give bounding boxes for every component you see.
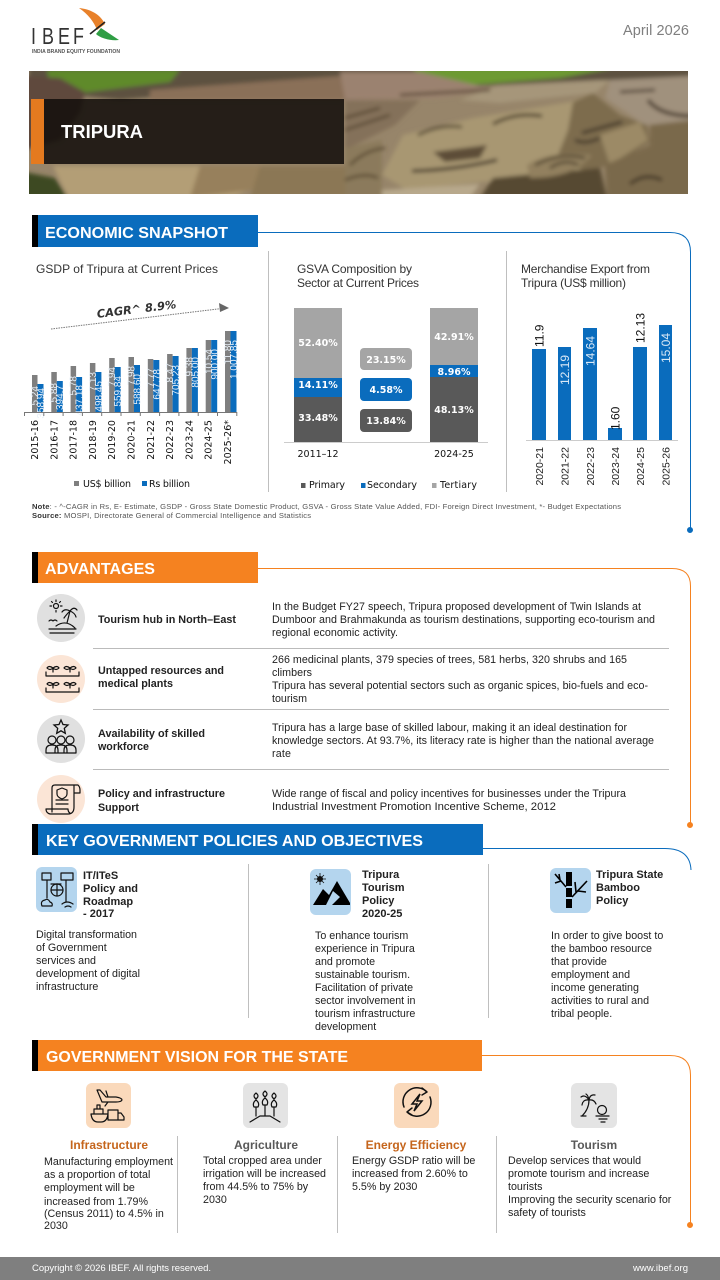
chart: GSVA composition: 42.91% xyxy=(434,332,474,343)
connector: economic snapshot xyxy=(258,232,692,532)
chart: GSDP xyxy=(24,262,240,490)
chart: GSVA composition: 33.48% xyxy=(298,413,338,424)
vision title: tourism: Tourism xyxy=(571,1138,617,1152)
advantage label: policy xyxy=(98,788,225,814)
policy title: tourism: Policy xyxy=(362,895,395,907)
vision text: tourism: safety of tourists xyxy=(508,1207,586,1219)
chart: GSDP: 437.18 xyxy=(74,385,86,416)
icon: energy xyxy=(394,1083,439,1128)
chart: merchandise export: Tripura (US$ million) xyxy=(521,276,626,290)
vision text: tourism: Improving the security scenario for xyxy=(508,1194,672,1206)
chart: GSDP: GSDP of Tripura at Current Prices xyxy=(36,262,218,276)
chart: GSVA composition: Sector at Current Prices xyxy=(297,276,419,290)
source note: Note: - ^-CAGR in Rs, E- Estimate, GSDP - Gross State Domestic Product, GSVA - Gross State Value Added, FDI- Foreign Direct Investment, *- Budget Expectations xyxy=(32,502,621,511)
chart: GSDP: 2024-25 xyxy=(204,420,215,460)
chart: GSDP: 2019-20 xyxy=(107,420,118,460)
policy text: tourism: experience in Tripura xyxy=(315,943,415,955)
policy text: tourism: sustainable tourism. xyxy=(315,969,410,981)
advantage text: workforce xyxy=(272,722,654,760)
chart: GSVA composition: 52.40% xyxy=(298,338,338,349)
advantage text: workforce: knowledge sectors. At 93.7%, its literacy rate is higher than the national average xyxy=(272,735,654,747)
vision text: infrastructure: 2030 xyxy=(44,1220,68,1232)
chart: merchandise export: 2025-26 xyxy=(660,447,672,486)
chart: GSDP: 2017-18 xyxy=(69,420,80,460)
advantage label: tourism: Tourism hub in North–East xyxy=(98,614,236,626)
advantage text: tourism: Dumboor and Brahmakunda as tourism destinations, supporting eco-tourism and xyxy=(272,614,655,626)
chart: GSVA composition: Tertiary xyxy=(439,480,477,491)
chart: merchandise export: 2022-23 xyxy=(585,447,597,486)
chart: GSVA composition: 48.13% xyxy=(434,405,474,416)
advantage label: plants: Untapped resources and xyxy=(98,665,224,677)
policy text: tourism: To enhance tourism xyxy=(315,930,408,942)
chart: GSDP: 394.7 xyxy=(55,385,66,410)
vision text: infrastructure: Manufacturing employment xyxy=(44,1156,173,1168)
chart: merchandise export: 2024-25 xyxy=(635,447,647,486)
advantage text: workforce: Tripura has a large base of skilled labour, making it an ideal destination for xyxy=(272,722,627,734)
icon: bamboo xyxy=(550,868,591,913)
policy text: IT: Digital transformation xyxy=(36,929,137,941)
chart: GSDP: 588.60 xyxy=(132,374,144,405)
chart: GSDP: 2021-22 xyxy=(146,420,157,460)
logo: IBEF: INDIA BRAND EQUITY FOUNDATION xyxy=(32,49,120,55)
policy text: tourism: sector involvement in xyxy=(315,995,415,1007)
chart: GSDP: 2023-24 xyxy=(184,420,195,460)
heading: government vision xyxy=(32,1040,482,1071)
chart: GSDP: CAGR^ 8.9% xyxy=(96,298,177,321)
chart: merchandise export xyxy=(521,262,678,486)
chart: GSDP: 2020-21 xyxy=(126,420,138,460)
chart: GSDP: 2025-26* xyxy=(223,420,234,464)
policy text: bamboo: tribal people. xyxy=(551,1008,612,1020)
connector: advantages xyxy=(258,568,692,828)
policy title: bamboo: Bamboo xyxy=(596,882,640,894)
divider xyxy=(268,251,506,492)
vision text: tourism: tourists xyxy=(508,1181,542,1193)
policy text: tourism: tourism infrastructure xyxy=(315,1008,415,1020)
date: April 2026 xyxy=(623,23,689,39)
chart: GSVA composition: 2024-25 xyxy=(434,449,474,460)
vision text: energy xyxy=(352,1155,475,1193)
chart: GSDP: 11.80 xyxy=(223,340,234,364)
policy title: IT xyxy=(83,870,138,920)
heading: government vision: GOVERNMENT VISION FOR THE STATE xyxy=(46,1049,348,1066)
chart: GSVA composition: 13.84% xyxy=(366,416,406,427)
chart: GSDP: Rs billion xyxy=(149,479,190,490)
icon: infrastructure xyxy=(86,1083,131,1128)
policy text: bamboo xyxy=(551,930,663,1020)
advantage label: workforce xyxy=(97,728,205,753)
chart: GSDP: 900.00 xyxy=(210,349,221,380)
vision text: infrastructure xyxy=(44,1156,173,1232)
chart: merchandise export: 2023-24 xyxy=(610,447,622,486)
footer: www.ibef.org xyxy=(632,1263,688,1274)
chart: merchandise export: Merchandise Export from xyxy=(521,262,650,276)
chart: GSVA composition xyxy=(284,262,488,491)
connector: vision xyxy=(482,1056,692,1228)
chart: GSVA composition: 14.11% xyxy=(298,380,338,391)
chart: merchandise export: 1.60 xyxy=(608,406,622,430)
chart: GSDP: 2022-23 xyxy=(165,420,176,460)
advantage text: policy: Industrial Investment Promotion Incentive Scheme, 2012 xyxy=(272,801,556,813)
chart: GSDP: 7.77 xyxy=(146,368,157,387)
panel: vision xyxy=(44,1083,672,1233)
advantage label: workforce: workforce xyxy=(97,741,149,753)
vision text: tourism: Develop services that would xyxy=(508,1155,641,1167)
policy text: tourism xyxy=(315,930,415,1033)
vision text: tourism: promote tourism and increase xyxy=(508,1168,649,1180)
chart: GSDP: 5.88 xyxy=(49,383,60,402)
chart: merchandise export: 12.19 xyxy=(558,355,572,385)
chart: merchandise export: 15.04 xyxy=(659,333,673,363)
vision text: energy: increased from 2.60% to xyxy=(352,1168,468,1180)
source note xyxy=(32,502,621,520)
banner title box: TRIPURA xyxy=(61,122,143,142)
chart: merchandise export: 2020-21 xyxy=(534,447,546,486)
connector: key policies xyxy=(483,848,691,870)
chart: GSVA composition: 2011–12 xyxy=(297,449,339,460)
vision text: tourism xyxy=(508,1155,672,1219)
chart: GSDP: 559.84 xyxy=(113,376,124,407)
chart: GSDP: 5.24 xyxy=(30,386,41,405)
advantage text: plants xyxy=(272,654,648,705)
policy title: bamboo: Tripura State xyxy=(596,869,663,881)
chart: GSDP: 2016-17 xyxy=(49,420,60,460)
advantage text: plants: climbers xyxy=(272,667,312,679)
icon: IT xyxy=(36,867,77,912)
advantage text: tourism xyxy=(272,601,655,639)
chart: merchandise export: 11.9 xyxy=(532,324,546,347)
advantage text: policy: Wide range of fiscal and policy incentives for businesses under the Tripura xyxy=(272,788,626,800)
policy title: IT: Policy and xyxy=(83,883,138,895)
advantage label: plants: medical plants xyxy=(98,678,173,690)
panel: policies xyxy=(36,864,663,1033)
advantage text: workforce: rate xyxy=(272,748,291,760)
policy text: tourism: development xyxy=(315,1021,376,1033)
policy title: tourism: 2020-25 xyxy=(362,908,402,920)
chart: GSVA composition: 8.96% xyxy=(438,367,471,378)
chart: GSDP: 805.00 xyxy=(190,357,202,388)
policy title: IT: IT/ITeS xyxy=(83,870,118,882)
policy text: bamboo: that provide xyxy=(551,956,607,968)
chart: GSVA composition: 23.15% xyxy=(366,355,406,366)
logo: IBEF xyxy=(31,8,120,55)
chart: GSVA composition: Secondary xyxy=(367,480,417,491)
heading: advantages xyxy=(32,552,258,583)
advantage text: plants: Tripura has several potential sectors such as organic spices, bio-fuels and eco- xyxy=(272,680,648,692)
advantage label: policy: Policy and infrastructure xyxy=(98,788,225,800)
chart: GSDP: 358.94 xyxy=(36,388,47,419)
policy text: bamboo: income generating xyxy=(551,982,639,994)
advantage text: tourism: In the Budget FY27 speech, Tripura proposed development of Twin Islands at xyxy=(272,601,641,613)
chart: GSVA composition: GSVA Composition by xyxy=(297,262,412,276)
vision text: infrastructure: employment will be xyxy=(44,1182,135,1194)
chart: GSDP: 7.13 xyxy=(88,372,99,391)
chart: GSVA composition: Primary xyxy=(309,480,345,491)
vision title: infrastructure: Infrastructure xyxy=(70,1138,148,1152)
banner title box xyxy=(31,99,344,164)
chart: GSDP: 2015-16 xyxy=(30,420,41,460)
policy text: tourism: Facilitation of private xyxy=(315,982,413,994)
policy title: tourism xyxy=(362,869,405,920)
chart: GSDP: 2018-19 xyxy=(88,420,99,460)
vision text: infrastructure: (Census 2011) to 4.5% in xyxy=(44,1208,164,1220)
footer: Copyright © 2026 IBEF. All rights reserved. xyxy=(32,1263,211,1274)
vision text: energy: Energy GSDP ratio will be xyxy=(352,1155,475,1167)
icon: policy scroll xyxy=(37,775,85,823)
advantage label: plants xyxy=(98,665,224,690)
heading: key government policies xyxy=(32,824,483,855)
vision title: energy: Energy Efficiency xyxy=(366,1138,467,1152)
vision text: infrastructure: increased from 1.79% xyxy=(44,1196,148,1208)
icon: skilled workforce xyxy=(37,715,85,763)
chart: GSDP: 647.78 xyxy=(152,369,163,400)
policy title: bamboo xyxy=(596,869,663,907)
chart: GSDP: 7.94 xyxy=(107,367,118,386)
heading: economic snapshot xyxy=(32,215,258,247)
vision text: agriculture: irrigation will be increased xyxy=(203,1168,326,1180)
policy text: bamboo: employment and xyxy=(551,969,630,981)
footer xyxy=(0,1257,720,1280)
chart: GSDP: 498.45 xyxy=(94,381,105,412)
chart: GSDP: 8.47 xyxy=(165,363,176,382)
chart: GSDP: 705.23 xyxy=(171,365,182,396)
vision text: infrastructure: as a proportion of total xyxy=(44,1169,150,1181)
policy title: bamboo: Policy xyxy=(596,895,629,907)
policy text: IT: services and xyxy=(36,955,96,967)
chart: GSDP: 1,007.85 xyxy=(229,340,240,379)
heading: economic snapshot: ECONOMIC SNAPSHOT xyxy=(45,225,228,242)
vision text: agriculture: Total cropped area under xyxy=(203,1155,322,1167)
source note: Source: MOSPI, Directorate General of Commercial Intelligence and Statistics xyxy=(32,511,311,520)
advantage text: plants: tourism xyxy=(272,693,307,705)
chart: GSDP: 9.38 xyxy=(184,357,196,376)
panel: advantages list xyxy=(37,594,669,823)
chart: GSVA composition: 4.58% xyxy=(370,385,403,396)
policy title: IT: - 2017 xyxy=(83,908,114,920)
policy text: IT: of Government xyxy=(36,942,107,954)
policy text: IT: development of digital xyxy=(36,968,140,980)
heading: key government policies: KEY GOVERNMENT POLICIES AND OBJECTIVES xyxy=(46,833,423,850)
icon: agriculture xyxy=(243,1083,288,1128)
chart: merchandise export: 14.64 xyxy=(584,336,598,366)
banner photo: carved rock xyxy=(24,66,693,198)
policy title: tourism: Tripura xyxy=(362,869,400,881)
advantage text: tourism: regional economic activity. xyxy=(272,627,398,639)
logo: IBEF: IBEF xyxy=(31,24,84,50)
chart: GSDP: 10.54 xyxy=(204,349,215,374)
vision text: energy: 5.5% by 2030 xyxy=(352,1181,417,1193)
policy title: tourism: Tourism xyxy=(362,882,405,894)
chart: GSDP: 5.78 xyxy=(68,376,80,395)
policy text: IT: infrastructure xyxy=(36,981,98,993)
chart: merchandise export: 12.13 xyxy=(634,313,648,343)
chart: GSDP: 7.98 xyxy=(126,366,138,385)
policy text: bamboo: In order to give boost to xyxy=(551,930,663,942)
advantage text: plants: 266 medicinal plants, 379 species of trees, 581 herbs, 320 shrubs and 165 xyxy=(272,654,627,666)
policy text: bamboo: activities to rural and xyxy=(551,995,649,1007)
chart: GSDP: US$ billion xyxy=(83,479,131,490)
icon: tourism hub xyxy=(37,594,85,642)
icon: medical plants xyxy=(37,655,85,703)
chart: merchandise export: 2021-22 xyxy=(560,447,572,486)
heading: advantages: ADVANTAGES xyxy=(45,561,155,578)
vision text: agriculture xyxy=(203,1155,326,1206)
advantage label: workforce: Availability of skilled xyxy=(98,728,205,740)
vision title: agriculture: Agriculture xyxy=(234,1138,298,1152)
vision text: agriculture: from 44.5% to 75% by xyxy=(203,1181,309,1193)
icon: mountains xyxy=(310,869,351,915)
icon: tourism xyxy=(571,1083,617,1128)
advantage label: policy: Support xyxy=(98,802,139,814)
advantage text: policy xyxy=(272,788,626,813)
policy text: bamboo: the bamboo resource xyxy=(551,943,652,955)
vision text: agriculture: 2030 xyxy=(203,1194,227,1206)
policy title: IT: Roadmap xyxy=(83,896,133,908)
policy text: IT xyxy=(36,929,140,993)
policy text: tourism: and promote xyxy=(315,956,375,968)
